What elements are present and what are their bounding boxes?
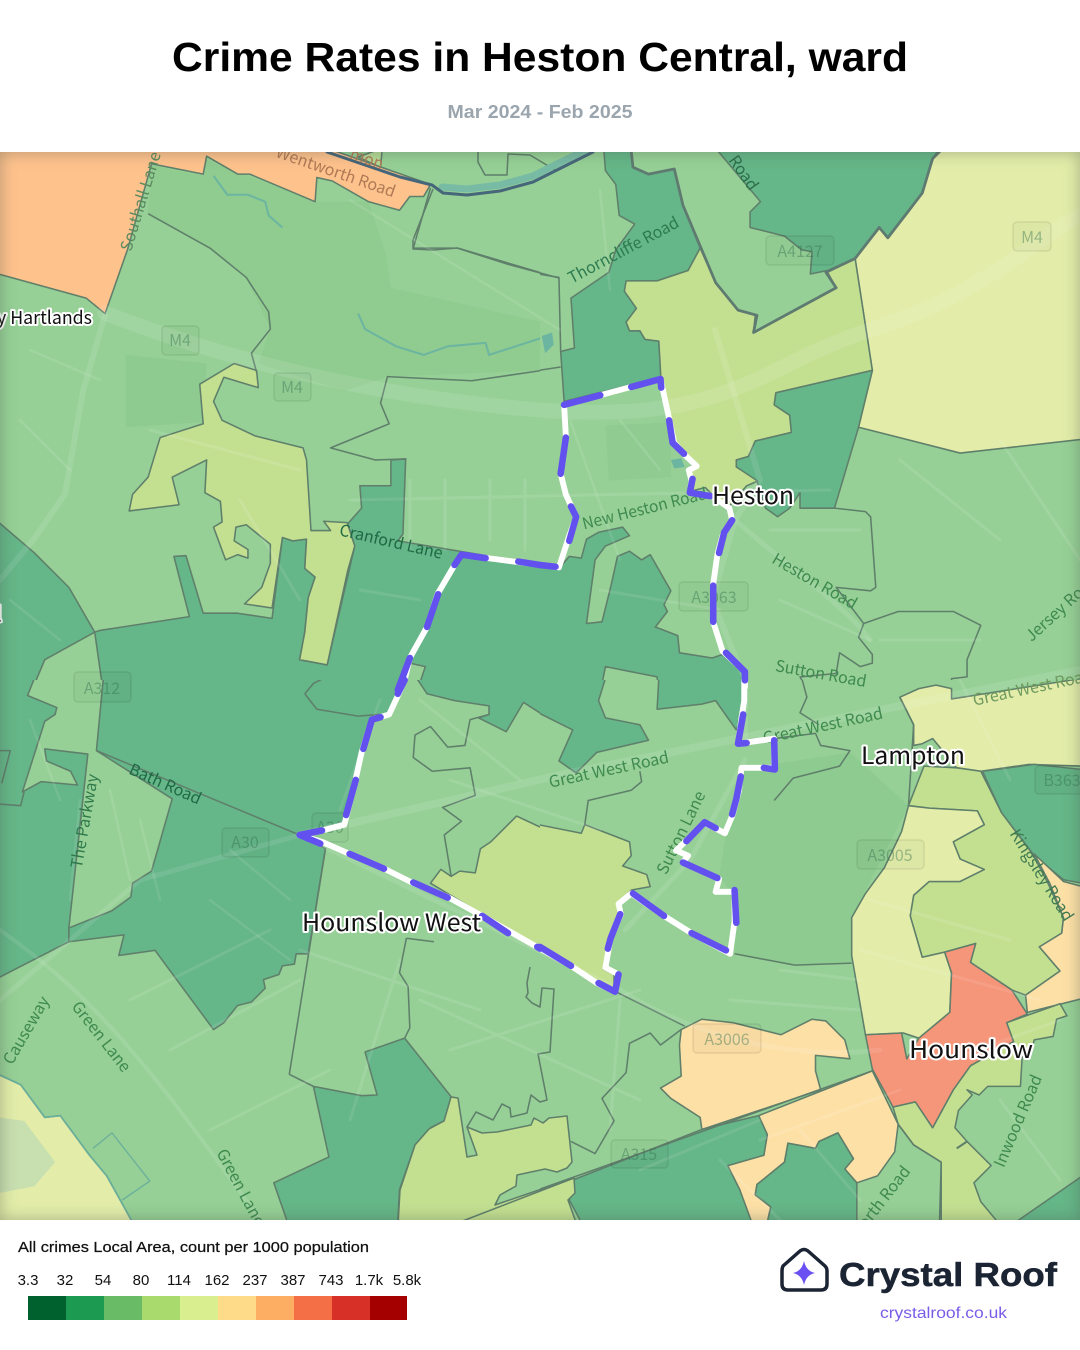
road labels: Great West Road <box>546 744 671 793</box>
road labels: Green Lane <box>67 995 138 1076</box>
road labels: Cranford Lane <box>338 517 446 564</box>
road labels: Heston Road <box>768 546 863 614</box>
map area: south-central light band and boundary <box>398 150 577 1225</box>
road labels: Thorncliffe Road <box>563 209 683 288</box>
place labels: Heston <box>712 476 794 511</box>
road labels: Bath Road <box>126 756 206 809</box>
place labels: Lampton <box>861 736 965 771</box>
legend tick labels: 743 <box>318 1272 344 1289</box>
legend title: All crimes Local Area, count per 1000 population <box>18 1239 369 1256</box>
legend tick labels: 162 <box>204 1272 230 1289</box>
legend tick labels: 54 <box>95 1272 111 1289</box>
map quadrant: south-west areas <box>0 678 542 1222</box>
road number shields: M4 <box>281 374 303 398</box>
map quadrant: north-east areas <box>538 148 1080 692</box>
road labels: Green Lane <box>212 1144 273 1230</box>
road number shields: M4 <box>169 327 191 351</box>
legend tick labels: 114 <box>167 1272 191 1289</box>
legend <box>18 1239 422 1320</box>
road number shields: A312 <box>84 675 120 699</box>
place labels <box>0 304 1033 1065</box>
road labels: Southall Lane <box>113 148 166 254</box>
road number shields: A3063 <box>691 584 737 608</box>
road labels: New Heston Road <box>579 480 709 534</box>
legend colour scale <box>28 1296 407 1320</box>
road number shields: A3005 <box>867 842 913 866</box>
road labels: Wentworth Road <box>273 139 399 202</box>
ward boundary: Heston Central <box>300 379 775 992</box>
legend tick labels: 32 <box>57 1272 73 1289</box>
road labels: Great West Road <box>760 700 885 749</box>
road number shields: B363 <box>1043 767 1080 791</box>
legend tick labels: 5.8k <box>393 1272 422 1289</box>
place labels: Hounslow West <box>302 903 481 938</box>
icon: house with star <box>782 1250 827 1290</box>
title: Crime Rates in Heston Central, ward <box>172 34 908 80</box>
map quadrant: south-east areas <box>538 678 1080 1222</box>
road labels: Sutton Road <box>774 652 869 692</box>
legend tick labels: 387 <box>280 1272 306 1289</box>
legend tick labels: 1.7k <box>355 1272 384 1289</box>
website: crystalroof.co.uk <box>880 1305 1008 1322</box>
road number shields: M4 <box>1021 224 1043 248</box>
place labels: Hounslow <box>909 1030 1033 1065</box>
logo: Crystal Roof <box>782 1250 1058 1322</box>
river and canal <box>327 148 593 195</box>
legend tick labels: 80 <box>133 1272 149 1289</box>
legend tick labels <box>18 1272 422 1289</box>
road labels: The Parkway <box>63 771 103 870</box>
road labels: Kingsley Road <box>1005 824 1080 925</box>
road number shields: A30 <box>316 814 344 838</box>
road labels: mon <box>347 140 387 174</box>
subtitle: date range: Mar 2024 - Feb 2025 <box>448 102 632 122</box>
road labels: Sutton Lane <box>649 786 710 878</box>
legend tick labels: 237 <box>242 1272 268 1289</box>
road number shields: A30 <box>231 829 259 853</box>
road number shields: A315 <box>621 1141 657 1165</box>
road labels: Inwood Road <box>986 1070 1047 1170</box>
road labels: Road <box>724 149 766 195</box>
logo wordmark: Crystal Roof <box>839 1256 1058 1293</box>
road number shields: A3006 <box>704 1026 750 1050</box>
road labels: North Road <box>844 1160 915 1242</box>
legend tick labels: 3.3 <box>18 1272 38 1289</box>
road number shields: A4127 <box>777 238 823 262</box>
road network <box>0 190 1080 1220</box>
map quadrant: north-west areas <box>0 148 542 692</box>
road number shields <box>74 222 1080 1168</box>
